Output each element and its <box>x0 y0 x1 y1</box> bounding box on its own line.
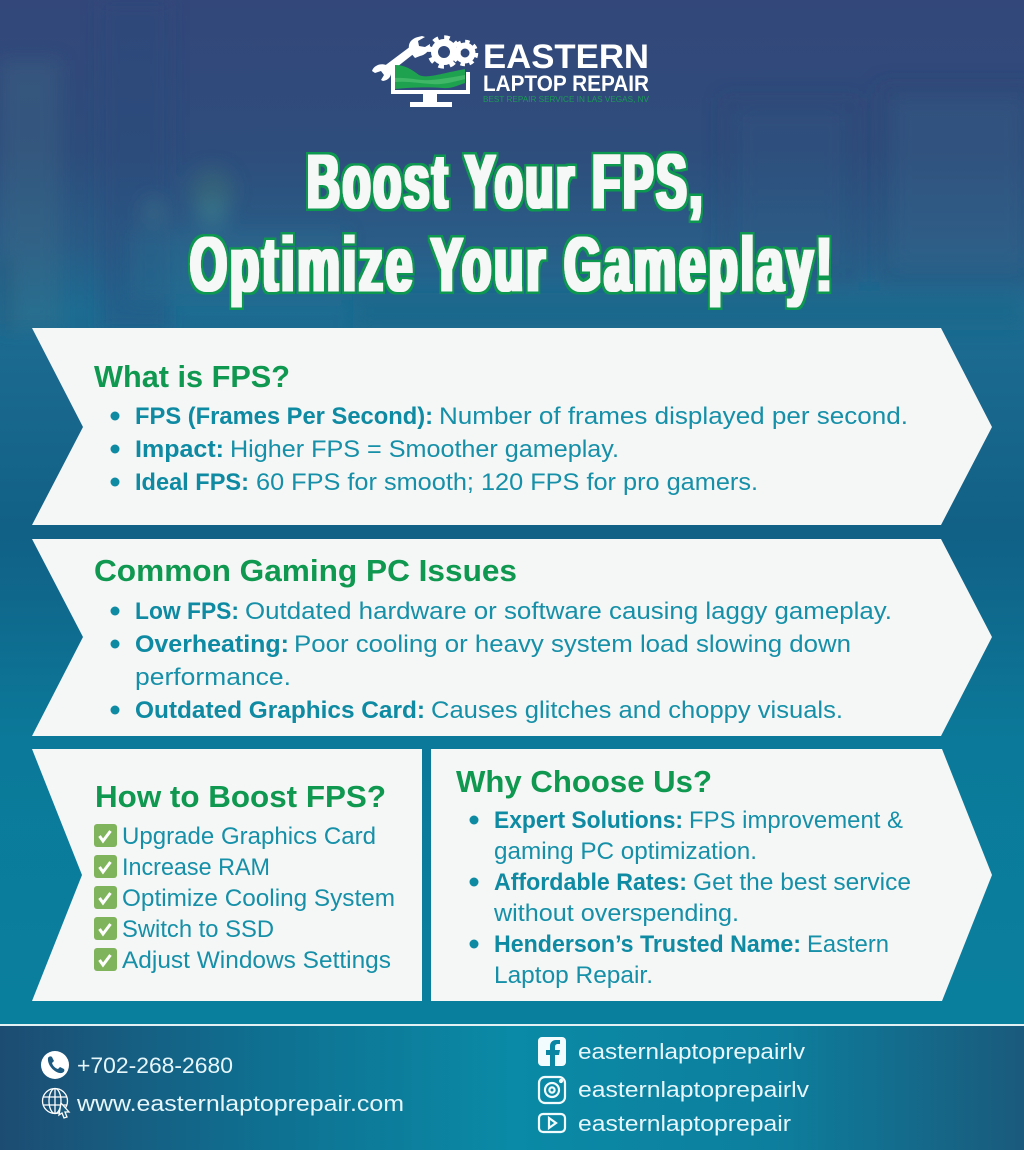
heading: what is FPS: What is FPS? <box>94 359 290 394</box>
text: website: www.easternlaptoprepair.com <box>76 1091 404 1116</box>
list: what is FPS <box>110 403 908 496</box>
checklist: Upgrade Graphics Card <box>122 823 376 850</box>
list: why choose us: Expert Solutions: <box>494 807 683 834</box>
list: why choose us: Laptop Repair. <box>494 962 653 989</box>
list: common issues: performance. <box>135 664 291 691</box>
list: what is FPS: Number of frames displayed per second. <box>439 403 908 430</box>
list: what is FPS: 60 FPS for smooth; 120 FPS for pro gamers. <box>256 469 758 496</box>
icon: facebook <box>538 1037 566 1066</box>
logo: EASTERN <box>483 38 649 76</box>
panel: why choose us <box>431 749 992 1001</box>
list: common issues: Low FPS: <box>135 598 239 625</box>
logo: BEST REPAIR SERVICE IN LAS VEGAS, NV <box>483 95 650 104</box>
panel: common gaming PC issues <box>32 539 992 736</box>
icon: monitor <box>391 63 470 107</box>
list: common issues: Overheating: <box>135 631 289 658</box>
list: what is FPS: FPS (Frames Per Second): <box>135 403 433 430</box>
text: youtube handle: easternlaptoprepair <box>578 1111 791 1136</box>
icon: globe <box>42 1088 69 1118</box>
heading: common issues: Common Gaming PC Issues <box>94 553 517 588</box>
list: common issues: Outdated Graphics Card: <box>135 697 425 724</box>
icon: wrench <box>372 36 430 81</box>
list: why choose us: FPS improvement & <box>689 807 903 834</box>
list: why choose us: gaming PC optimization. <box>494 838 757 865</box>
footer <box>0 1024 1024 1150</box>
heading: how to boost: How to Boost FPS? <box>95 779 386 814</box>
list: common issues <box>110 598 892 724</box>
checklist: Optimize Cooling System <box>122 885 395 912</box>
logo <box>372 36 650 107</box>
list: why choose us: Eastern <box>807 931 889 958</box>
list: common issues: Causes glitches and choppy visuals. <box>431 697 843 724</box>
text: phone number: +702-268-2680 <box>77 1053 233 1078</box>
checklist: Adjust Windows Settings <box>122 947 391 974</box>
list: why choose us: Affordable Rates: <box>494 869 687 896</box>
checklist: Increase RAM <box>122 854 270 881</box>
heading: why choose us: Why Choose Us? <box>456 764 712 799</box>
list: common issues: Poor cooling or heavy system load slowing down <box>294 631 851 658</box>
icon: instagram <box>539 1077 565 1103</box>
icon: gears <box>430 38 476 66</box>
list: what is FPS: Impact: <box>135 436 224 463</box>
list: common issues: Outdated hardware or software causing laggy gameplay. <box>245 598 892 625</box>
title: Boost Your FPS, <box>307 139 705 225</box>
text: instagram handle: easternlaptoprepairlv <box>578 1077 809 1102</box>
list: why choose us: without overspending. <box>493 900 739 927</box>
icon: phone <box>41 1051 69 1079</box>
list: why choose us: Get the best service <box>693 869 911 896</box>
title <box>190 139 835 308</box>
list: why choose us: Henderson’s Trusted Name: <box>494 931 801 958</box>
checklist: Switch to SSD <box>122 916 274 943</box>
list: why choose us <box>470 807 911 989</box>
panel: what is FPS <box>32 328 992 525</box>
icon: youtube <box>539 1114 565 1132</box>
logo: LAPTOP REPAIR <box>483 71 649 96</box>
list: what is FPS: Ideal FPS: <box>135 469 249 496</box>
checklist <box>94 823 395 974</box>
list: what is FPS: Higher FPS = Smoother gameplay. <box>230 436 619 463</box>
text: facebook handle: easternlaptoprepairlv <box>578 1039 805 1064</box>
panel: how to boost FPS <box>32 749 422 1001</box>
